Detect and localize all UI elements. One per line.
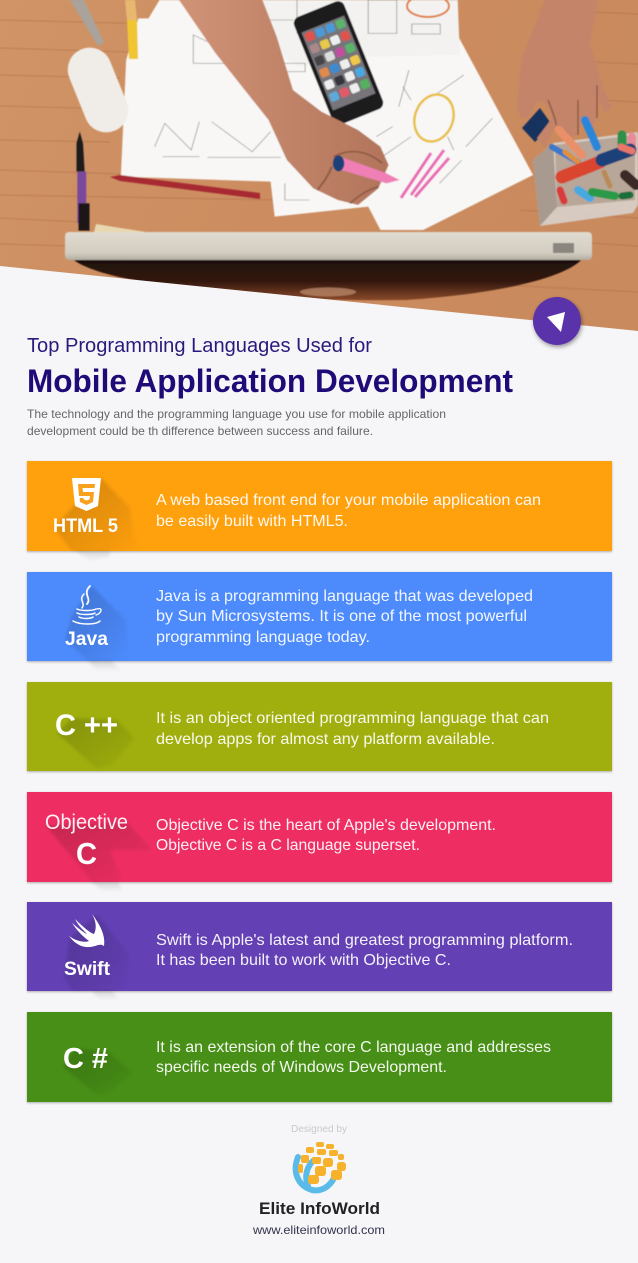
- description: specific needs of Windows Development.: [156, 1059, 447, 1076]
- card background: [27, 1012, 612, 1102]
- dark object in right hand: [522, 108, 552, 142]
- apple logo reflection: [300, 288, 356, 296]
- intro text: The technology and the programming language you use for mobile application: [27, 407, 446, 421]
- long shadow: [64, 915, 128, 1000]
- pink highlighter marks: [401, 150, 449, 198]
- wood desk: [0, 0, 638, 340]
- description: [156, 932, 573, 969]
- long shadow: [46, 822, 152, 892]
- long shadow: [54, 478, 142, 561]
- description: Objective C is the heart of Apple's development.: [156, 817, 496, 834]
- title line 1: Top Programming Languages Used for: [27, 335, 372, 357]
- description: Java is a programming language that was developed: [156, 588, 533, 605]
- card background: [27, 792, 612, 882]
- description: [156, 817, 496, 854]
- description: It is an object oriented programming language that can: [156, 710, 549, 727]
- sketch papers: [121, 0, 533, 230]
- intro text: development could be th difference between success and failure.: [27, 424, 373, 438]
- panel: Swift: [27, 902, 612, 1000]
- label: HTML 5: [53, 516, 118, 537]
- monitor underside: [73, 259, 582, 300]
- description: Objective C is a C language superset.: [156, 837, 420, 854]
- grey pen: [70, 0, 104, 46]
- heading: [27, 335, 513, 399]
- mouse: [61, 41, 135, 139]
- hero photo: desk from above: [0, 0, 638, 340]
- panel: Java: [27, 572, 612, 671]
- note under monitor: [94, 224, 146, 232]
- icon: coffee cup: [73, 586, 101, 624]
- yellow pencil: [125, 0, 138, 59]
- description: It is an extension of the core C language and addresses: [156, 1039, 551, 1056]
- wireframe sketch lines: [155, 0, 492, 200]
- description: [156, 1039, 551, 1076]
- round purple badge with arrow: [533, 297, 581, 345]
- description: Swift is Apple's latest and greatest programming platform.: [156, 932, 573, 949]
- description: [156, 492, 541, 530]
- left arm and hand: [179, 0, 389, 205]
- cup of markers: [533, 120, 638, 226]
- card background: [27, 682, 612, 771]
- description: It has been built to work with Objective C.: [156, 952, 451, 969]
- monitor top edge: [65, 232, 592, 260]
- pink marker: [333, 155, 400, 183]
- long shadow: [57, 718, 134, 769]
- card background: [27, 461, 612, 551]
- icon: HTML5 shield: [72, 478, 101, 511]
- smartphone: [292, 0, 385, 127]
- panel: C#: [27, 1012, 612, 1102]
- description: A web based front end for your mobile application can: [156, 492, 541, 509]
- logo globe and hand: [296, 1142, 346, 1190]
- description: by Sun Microsystems. It is one of the most powerful: [156, 608, 527, 625]
- white diagonal content background: [0, 266, 638, 1263]
- label: Objective: [45, 811, 128, 834]
- panel: HTML 5: [27, 461, 612, 561]
- footer credit: [252, 1124, 385, 1237]
- long shadow: [63, 1048, 133, 1095]
- description: be easily built with HTML5.: [156, 513, 348, 530]
- description: [156, 588, 533, 646]
- long shadow: [65, 586, 128, 671]
- purple pen: [76, 132, 90, 231]
- card background: [27, 572, 612, 661]
- panel: C++: [27, 682, 612, 771]
- label: C ++: [55, 709, 118, 742]
- red pencil: [110, 175, 260, 199]
- label: C #: [63, 1043, 108, 1075]
- company name: Elite InfoWorld: [259, 1199, 380, 1218]
- label: Java: [65, 629, 108, 650]
- intro text: [27, 407, 446, 438]
- label: Swift: [64, 959, 111, 980]
- label: C: [76, 836, 97, 871]
- description: [156, 710, 549, 748]
- icon: swift bird: [69, 914, 104, 947]
- description: develop apps for almost any platform available.: [156, 731, 495, 748]
- title line 2: Mobile Application Development: [27, 363, 513, 399]
- right hand: [517, 0, 612, 147]
- label: [45, 811, 128, 871]
- designed by: Designed by: [291, 1124, 347, 1135]
- yellow highlighter ring: [408, 89, 460, 147]
- description: programming language today.: [156, 629, 370, 646]
- card background: [27, 902, 612, 991]
- website: www.eliteinfoworld.com: [252, 1223, 385, 1237]
- orange circle sketch: [407, 0, 449, 17]
- panel: Objective C: [27, 792, 612, 892]
